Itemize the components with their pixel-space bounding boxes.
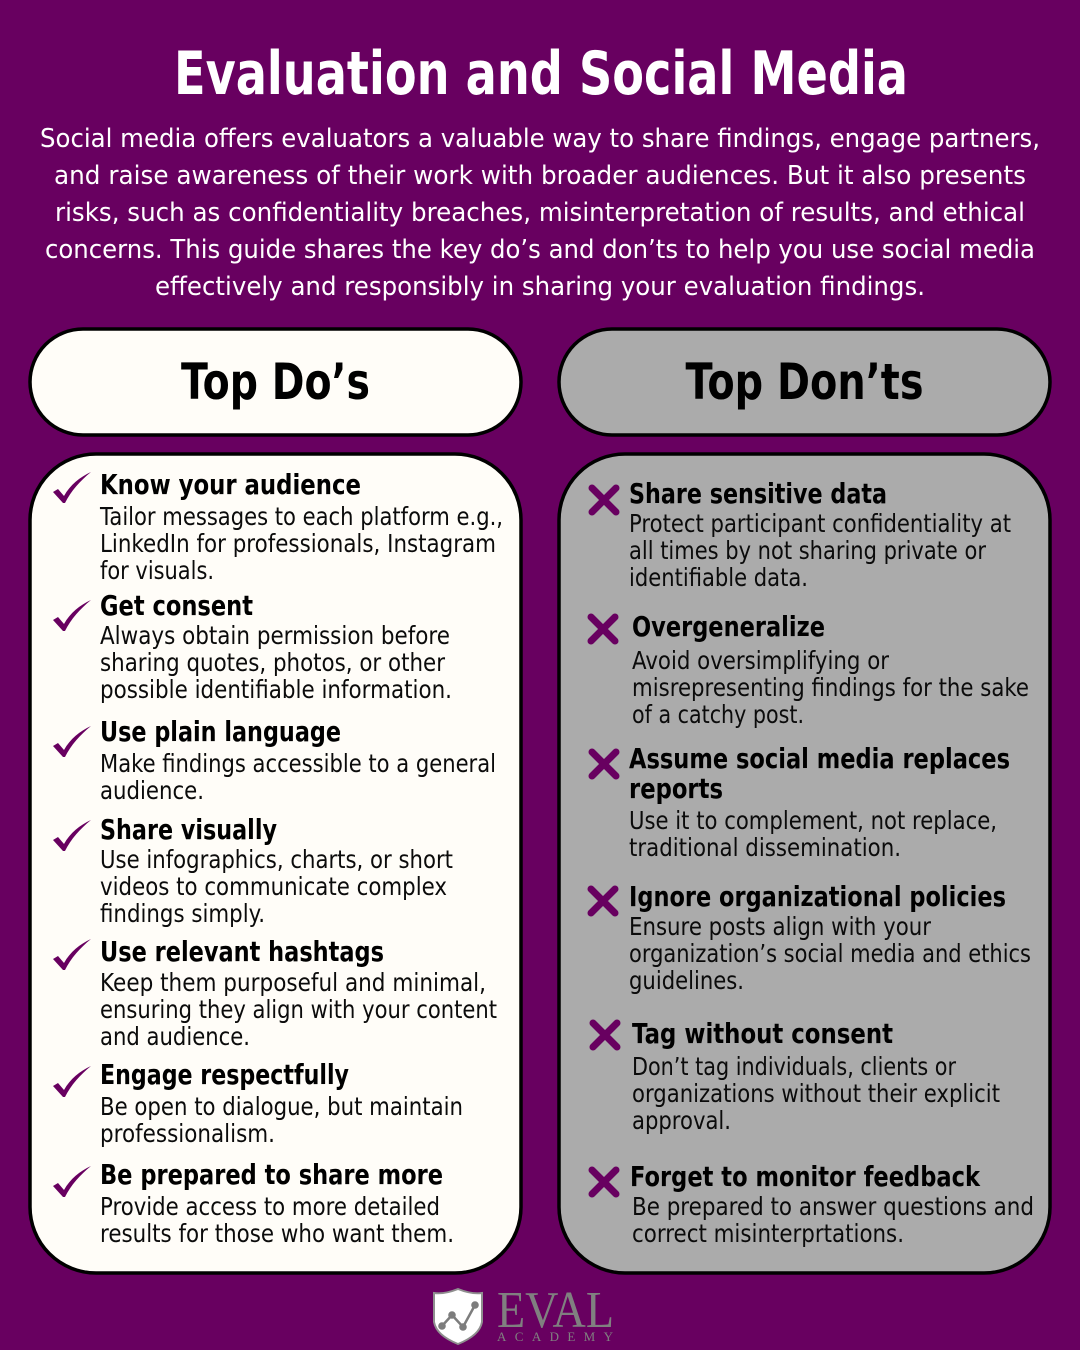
don't item: tag without consent: organizations without their explicit	[632, 1079, 1000, 1108]
intro paragraph: concerns. This guide shares the key do’s and don’ts to help you use social media	[45, 235, 1035, 265]
do item: know your audience: for visuals.	[100, 556, 214, 585]
do item: get consent: possible identifiable information.	[100, 675, 452, 704]
panel: top do's header	[30, 329, 521, 435]
don't item: ignore organizational policies	[591, 881, 1031, 995]
do item: use plain language	[53, 716, 496, 805]
do item: share visually: videos to communicate complex	[100, 872, 447, 901]
logo tagline: ACADEMY	[497, 1329, 614, 1344]
panel: top do's header: Top Do’s	[181, 353, 370, 411]
don't item: assume social media replaces reports	[592, 743, 1010, 862]
do item: get consent: sharing quotes, photos, or other	[100, 648, 446, 677]
do item: engage respectfully: Be open to dialogue, but maintain	[100, 1092, 463, 1121]
don't item: assume social media replaces reports: traditional dissemination.	[629, 833, 901, 862]
don't item: share sensitive data: identifiable data.	[629, 563, 808, 592]
don't item: share sensitive data: Share sensitive data	[629, 478, 887, 510]
don't item: overgeneralize: of a catchy post.	[632, 700, 804, 729]
do item: know your audience: Tailor messages to each platform e.g.,	[99, 502, 503, 531]
don't item: assume social media replaces reports: reports	[629, 773, 723, 805]
do item: share visually: Use infographics, charts, or short	[100, 845, 453, 874]
intro paragraph: Social media offers evaluators a valuable way to share findings, engage partners,	[40, 124, 1040, 154]
don't item: tag without consent: Tag without consent	[632, 1018, 893, 1050]
do item: use relevant hashtags	[53, 936, 497, 1051]
do item: use plain language: Make findings accessible to a general	[100, 749, 496, 778]
do item: get consent: Get consent	[100, 590, 253, 622]
don't item: assume social media replaces reports: Assume social media replaces	[629, 743, 1010, 775]
don't item: assume social media replaces reports: Use it to complement, not replace,	[629, 806, 997, 835]
intro paragraph	[40, 124, 1040, 302]
do item: share visually	[53, 814, 453, 928]
do item: know your audience: LinkedIn for professionals, Instagram	[100, 529, 496, 558]
icon: shield with chart line	[434, 1289, 482, 1344]
don't item: tag without consent	[593, 1018, 1000, 1135]
don't item: overgeneralize	[591, 611, 1029, 729]
don't item: share sensitive data: all times by not sharing private or	[629, 536, 987, 565]
intro paragraph: effectively and responsibly in sharing your evaluation findings.	[155, 272, 925, 302]
don't item: share sensitive data	[592, 478, 1011, 592]
do item: use relevant hashtags: Keep them purposeful and minimal,	[100, 968, 486, 997]
don't item: ignore organizational policies: Ensure posts align with your	[629, 912, 932, 941]
do item: know your audience: Know your audience	[100, 469, 361, 501]
don't item: forget to monitor feedback	[592, 1161, 1034, 1248]
do item: use plain language: Use plain language	[100, 716, 341, 748]
logo: eval academy	[434, 1282, 614, 1344]
do item: use relevant hashtags: ensuring they align with your content	[100, 995, 497, 1024]
don't item: overgeneralize: Overgeneralize	[632, 611, 825, 643]
do item: be prepared to share more	[53, 1159, 454, 1248]
don't item: forget to monitor feedback: correct misinterprtations.	[632, 1219, 904, 1248]
logo wordmark: EVAL	[497, 1282, 614, 1339]
panel: top don'ts header	[559, 329, 1050, 435]
do item: be prepared to share more: results for those who want them.	[100, 1219, 454, 1248]
do item: get consent	[53, 590, 452, 704]
panel: do's list	[30, 454, 521, 1273]
don't item: tag without consent: approval.	[632, 1106, 731, 1135]
do item: use plain language: audience.	[100, 776, 204, 805]
do item: use relevant hashtags: and audience.	[100, 1022, 250, 1051]
do item: be prepared to share more: Be prepared to share more	[100, 1159, 443, 1191]
do item: use relevant hashtags: Use relevant hashtags	[100, 936, 384, 968]
don't item: tag without consent: Don’t tag individuals, clients or	[632, 1052, 957, 1081]
do item: share visually: findings simply.	[100, 899, 265, 928]
panel: don'ts list	[559, 454, 1050, 1273]
panel: top don'ts header: Top Don’ts	[686, 353, 924, 411]
intro paragraph: risks, such as confidentiality breaches, misinterpretation of results, and ethical	[55, 198, 1025, 228]
do item: share visually: Share visually	[100, 814, 277, 846]
do item: engage respectfully: professionalism.	[100, 1119, 275, 1148]
do item: engage respectfully	[53, 1059, 463, 1148]
don't item: forget to monitor feedback: Forget to monitor feedback	[630, 1161, 981, 1193]
don't item: overgeneralize: Avoid oversimplifying or	[632, 646, 890, 675]
do item: be prepared to share more: Provide access to more detailed	[100, 1192, 440, 1221]
don't item: ignore organizational policies: Ignore organizational policies	[629, 881, 1006, 913]
intro paragraph: and raise awareness of their work with broader audiences. But it also presents	[54, 161, 1026, 191]
don't item: ignore organizational policies: guidelines.	[629, 966, 744, 995]
don't item: share sensitive data: Protect participant confidentiality at	[629, 509, 1011, 538]
do item: know your audience	[53, 469, 503, 585]
do item: get consent: Always obtain permission before	[100, 621, 450, 650]
do item: engage respectfully: Engage respectfully	[100, 1059, 349, 1091]
